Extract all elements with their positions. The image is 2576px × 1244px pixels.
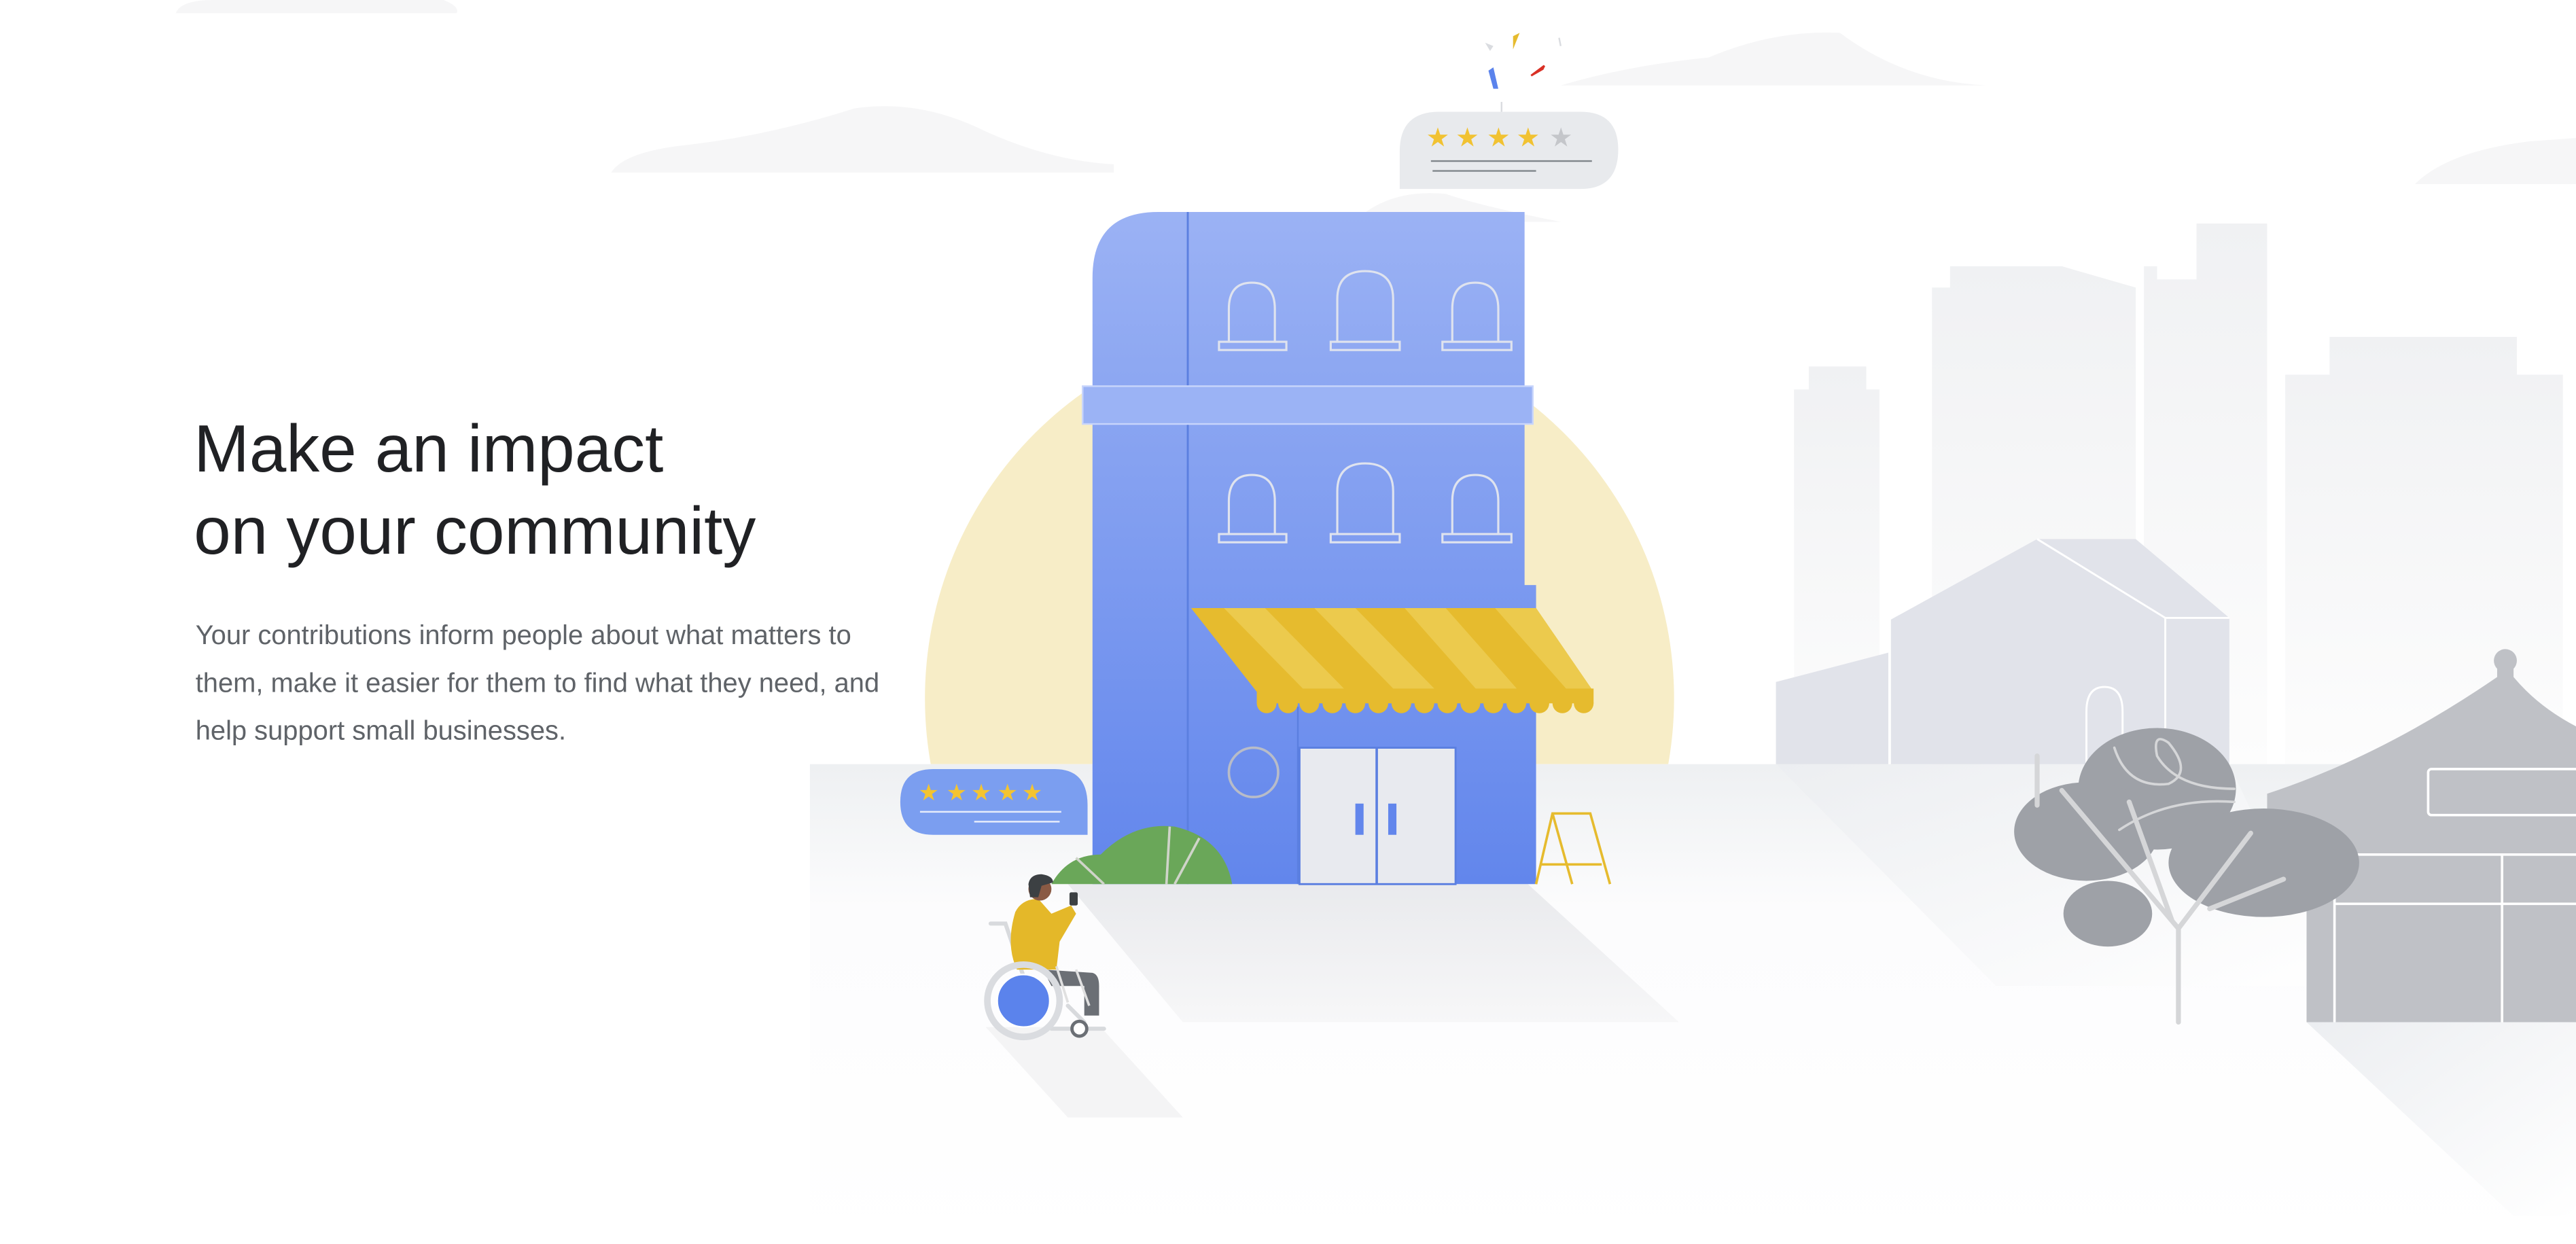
review bubble top: ★: [1549, 122, 1573, 153]
house: [1776, 539, 2229, 764]
title: Make an impact: [194, 411, 663, 486]
bush: [1051, 826, 1232, 884]
review bubble left: [900, 769, 1088, 835]
body text: them, make it easier for them to find what they need, and: [196, 668, 879, 698]
review bubble top: [1400, 111, 1618, 189]
review bubble left: ★: [971, 779, 991, 806]
review bubble top: ★: [1426, 122, 1449, 153]
review bubble left: ★: [919, 779, 939, 806]
awning: [1191, 608, 1593, 713]
review bubble left: ★: [1022, 779, 1042, 806]
review bubble left: ★: [998, 779, 1018, 806]
ground: [810, 764, 2576, 1244]
clouds: [176, 0, 2576, 222]
review bubble left: ★: [947, 779, 967, 806]
round window: [1229, 748, 1278, 797]
title: on your community: [194, 493, 756, 568]
person in wheelchair: [987, 874, 1104, 1037]
ledge: [1082, 386, 1533, 424]
sun: [925, 393, 1674, 764]
title: [194, 411, 756, 568]
review bubble top: ★: [1455, 122, 1479, 153]
city towers: [1794, 224, 2563, 764]
tree: [2014, 728, 2359, 1022]
review bubble top: ★: [1517, 122, 1540, 153]
windows: [1219, 271, 1511, 542]
body text: help support small businesses.: [196, 715, 566, 745]
door: [1299, 748, 1455, 884]
body text: [196, 620, 879, 745]
body text: Your contributions inform people about what matters to: [196, 620, 851, 650]
confetti: [1485, 33, 1561, 111]
sign stand: [1536, 813, 1610, 884]
building: [1082, 212, 1536, 884]
review bubble top: ★: [1487, 122, 1511, 153]
shadows: [986, 764, 2576, 1216]
pagoda building: [2267, 649, 2576, 1022]
